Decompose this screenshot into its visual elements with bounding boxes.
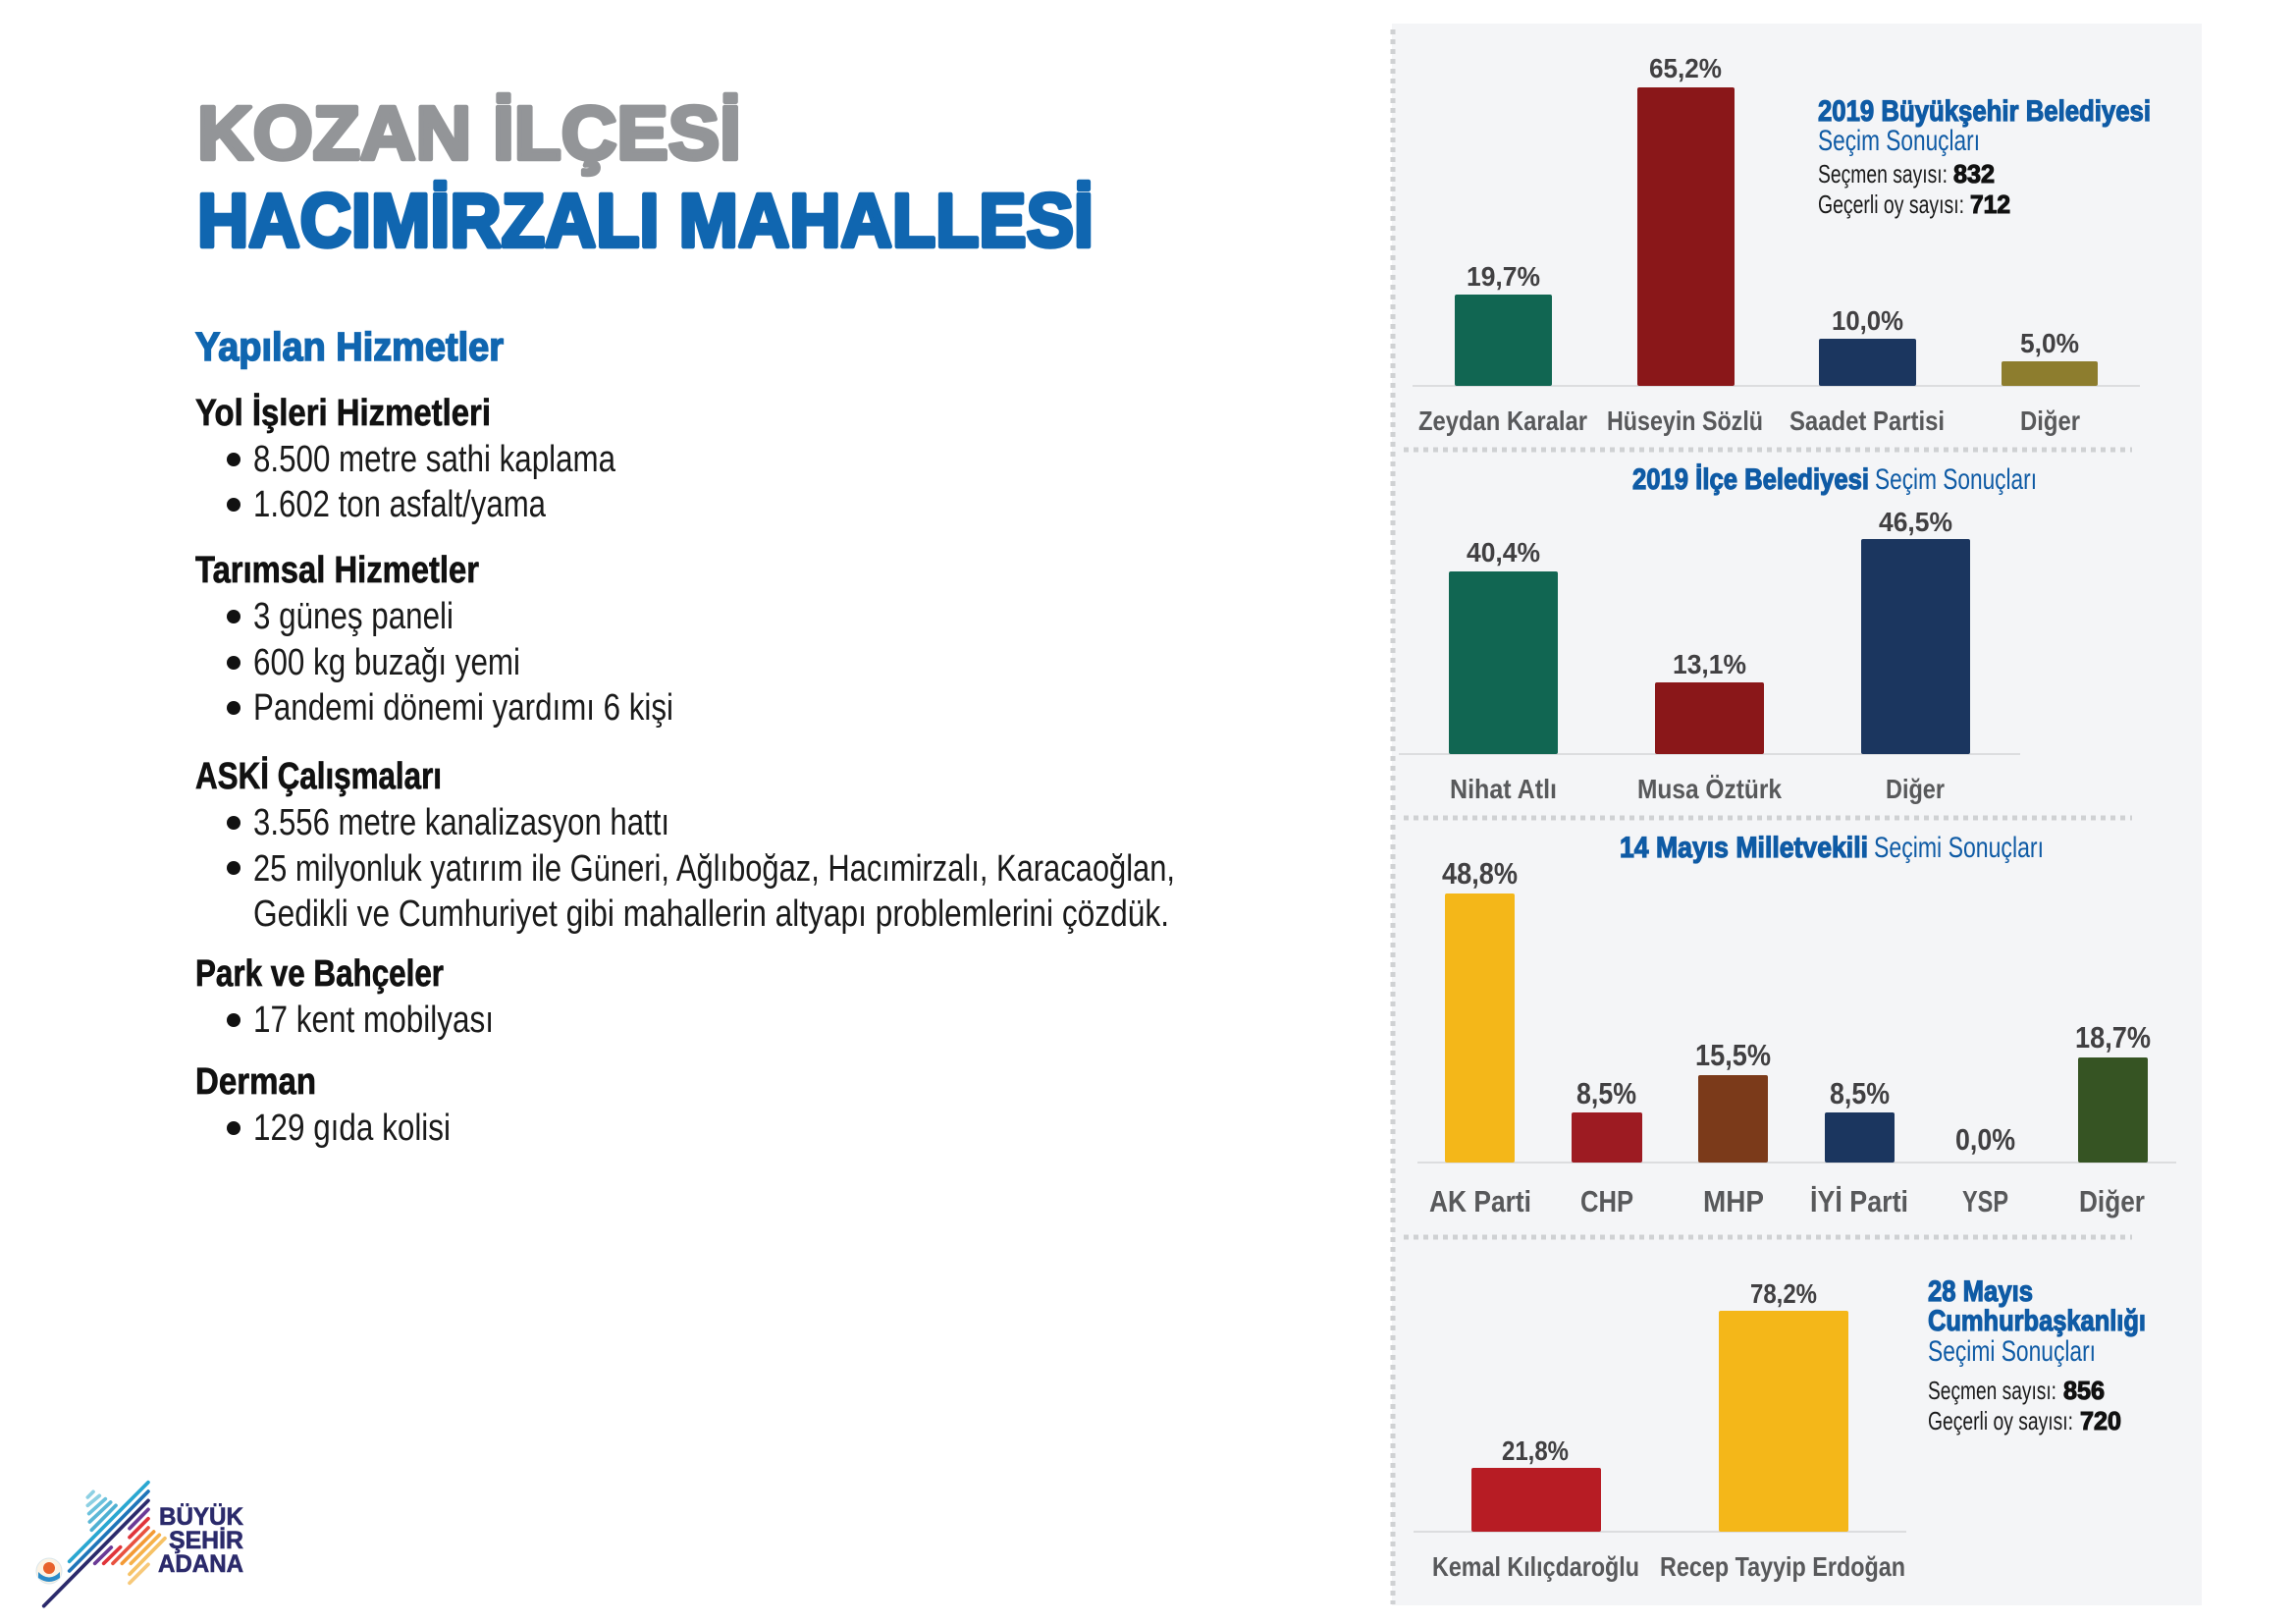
ASKİ Çalışmaları: ASKİ Çalışmaları — [195, 756, 442, 797]
bar chart: 8,5% — [1576, 1076, 1636, 1110]
panel: 2019 İlçe Belediyesi results — [1399, 463, 2037, 804]
Park ve Bahçeler: 17 kent mobilyası — [253, 1000, 494, 1041]
bar chart — [1414, 1278, 1906, 1582]
title: KOZAN İLÇESİ — [197, 91, 741, 176]
bar chart: 8,5% — [1830, 1076, 1890, 1110]
ASKİ Çalışmaları: 3.556 metre kanalizasyon hattı — [253, 802, 669, 843]
bar chart: 19,7% — [1467, 261, 1540, 292]
bar chart: Hüseyin Sözlü — [1607, 406, 1763, 436]
ASKİ Çalışmaları — [195, 756, 1175, 935]
heading and voter counts: 856 — [2063, 1376, 2105, 1405]
bar chart: 21,8% — [1502, 1435, 1569, 1466]
icon: Büyükşehir Adana logo: ŞEHİR — [169, 1527, 243, 1554]
panel: 2019 Büyükşehir Belediyesi results — [1413, 53, 2151, 436]
heading and voter counts: 2019 Büyükşehir Belediyesi — [1818, 95, 2151, 128]
bar chart: 0,0% — [1955, 1122, 2015, 1157]
bar chart: Nihat Atlı — [1450, 774, 1557, 804]
heading and voter counts: Cumhurbaşkanlığı — [1928, 1305, 2146, 1337]
icon: Büyükşehir Adana logo: BÜYÜK — [159, 1502, 243, 1531]
panel: 28 Mayıs Cumhurbaşkanlığı results — [1414, 1275, 2146, 1582]
bar chart: 48,8% — [1442, 856, 1518, 891]
bar chart — [1417, 856, 2176, 1218]
bar chart: 65,2% — [1649, 53, 1722, 83]
heading and voter counts: Seçmen sayısı: — [1928, 1376, 2056, 1405]
Yol İşleri Hizmetleri: 1.602 ton asfalt/yama — [253, 484, 547, 525]
bar chart: 78,2% — [1750, 1278, 1817, 1309]
heading: Yapılan Hizmetler: Yapılan Hizmetler — [195, 324, 504, 369]
bar chart: Recep Tayyip Erdoğan — [1660, 1551, 1905, 1582]
Park ve Bahçeler: Park ve Bahçeler — [195, 953, 444, 995]
heading: Seçim Sonuçları — [1875, 463, 2037, 496]
heading and voter counts: 712 — [1970, 189, 2010, 219]
panel: 14 Mayıs Milletvekili results — [1417, 832, 2176, 1218]
bar chart: Diğer — [1886, 774, 1945, 804]
heading and voter counts: Seçmen sayısı: — [1818, 159, 1948, 189]
Yol İşleri Hizmetleri — [195, 393, 616, 525]
bar chart: İYİ Parti — [1810, 1184, 1908, 1218]
bar chart: YSP — [1962, 1184, 2008, 1218]
heading and voter counts: Seçim Sonuçları — [1818, 125, 1980, 157]
heading — [1620, 832, 2044, 864]
Tarımsal Hizmetler: 3 güneş paneli — [253, 596, 454, 637]
bar chart: 5,0% — [2020, 328, 2079, 358]
bar chart: AK Parti — [1429, 1184, 1531, 1218]
bar chart: 46,5% — [1879, 507, 1952, 537]
Derman — [195, 1061, 451, 1149]
heading and voter counts: Geçerli oy sayısı: — [1818, 189, 1964, 219]
heading: 14 Mayıs Milletvekili — [1620, 832, 1868, 864]
heading and voter counts: 832 — [1953, 159, 1995, 189]
bar chart: CHP — [1580, 1184, 1633, 1218]
bar chart — [1413, 53, 2140, 436]
heading and voter counts: 720 — [2080, 1406, 2121, 1435]
bar chart: 10,0% — [1832, 305, 1903, 336]
Derman: Derman — [195, 1061, 316, 1103]
icon: Büyükşehir Adana logo: ADANA — [158, 1550, 243, 1578]
icon: Büyükşehir Adana logo — [36, 1483, 243, 1606]
heading and voter counts — [1928, 1275, 2146, 1435]
bar chart: Diğer — [2079, 1184, 2145, 1218]
Tarımsal Hizmetler: Tarımsal Hizmetler — [195, 550, 479, 591]
heading and voter counts — [1818, 95, 2151, 219]
bar chart: Kemal Kılıçdaroğlu — [1432, 1551, 1639, 1582]
title — [197, 91, 1094, 263]
vertical and horizontal dotted dividers — [1393, 29, 2132, 1604]
heading — [1632, 463, 2037, 496]
heading and voter counts: Geçerli oy sayısı: — [1928, 1406, 2073, 1435]
bar chart: MHP — [1703, 1184, 1764, 1218]
heading and voter counts: Seçimi Sonuçları — [1928, 1335, 2096, 1368]
Tarımsal Hizmetler: 600 kg buzağı yemi — [253, 642, 520, 683]
bar chart: Saadet Partisi — [1789, 406, 1945, 436]
ASKİ Çalışmaları: 25 milyonluk yatırım ile Güneri, Ağlıboğaz, Hacımirzalı, Karacaoğlan, — [253, 848, 1175, 890]
bar chart: 13,1% — [1673, 649, 1746, 679]
title: HACIMİRZALI MAHALLESİ — [197, 179, 1094, 263]
Park ve Bahçeler — [195, 953, 494, 1041]
bar chart: Musa Öztürk — [1637, 774, 1782, 804]
Yol İşleri Hizmetleri: Yol İşleri Hizmetleri — [195, 393, 491, 434]
panel: election results background — [1392, 24, 2202, 1605]
Derman: 129 gıda kolisi — [253, 1108, 451, 1149]
text block: services list — [195, 393, 1175, 1149]
bar chart: Zeydan Karalar — [1418, 406, 1587, 436]
bar chart: 18,7% — [2075, 1020, 2151, 1055]
Tarımsal Hizmetler: Pandemi dönemi yardımı 6 kişi — [253, 687, 673, 729]
heading: Seçimi Sonuçları — [1874, 832, 2044, 864]
bar chart: Diğer — [2020, 406, 2080, 436]
ASKİ Çalışmaları: Gedikli ve Cumhuriyet gibi mahallerin altyapı problemlerini çözdük. — [253, 893, 1169, 935]
Yol İşleri Hizmetleri: 8.500 metre sathi kaplama — [253, 439, 616, 480]
Tarımsal Hizmetler — [195, 550, 673, 729]
bar chart: 15,5% — [1695, 1038, 1771, 1072]
heading: 2019 İlçe Belediyesi — [1632, 463, 1869, 496]
heading and voter counts: 28 Mayıs — [1928, 1275, 2033, 1308]
bar chart — [1399, 507, 2020, 804]
bar chart: 40,4% — [1467, 537, 1540, 568]
